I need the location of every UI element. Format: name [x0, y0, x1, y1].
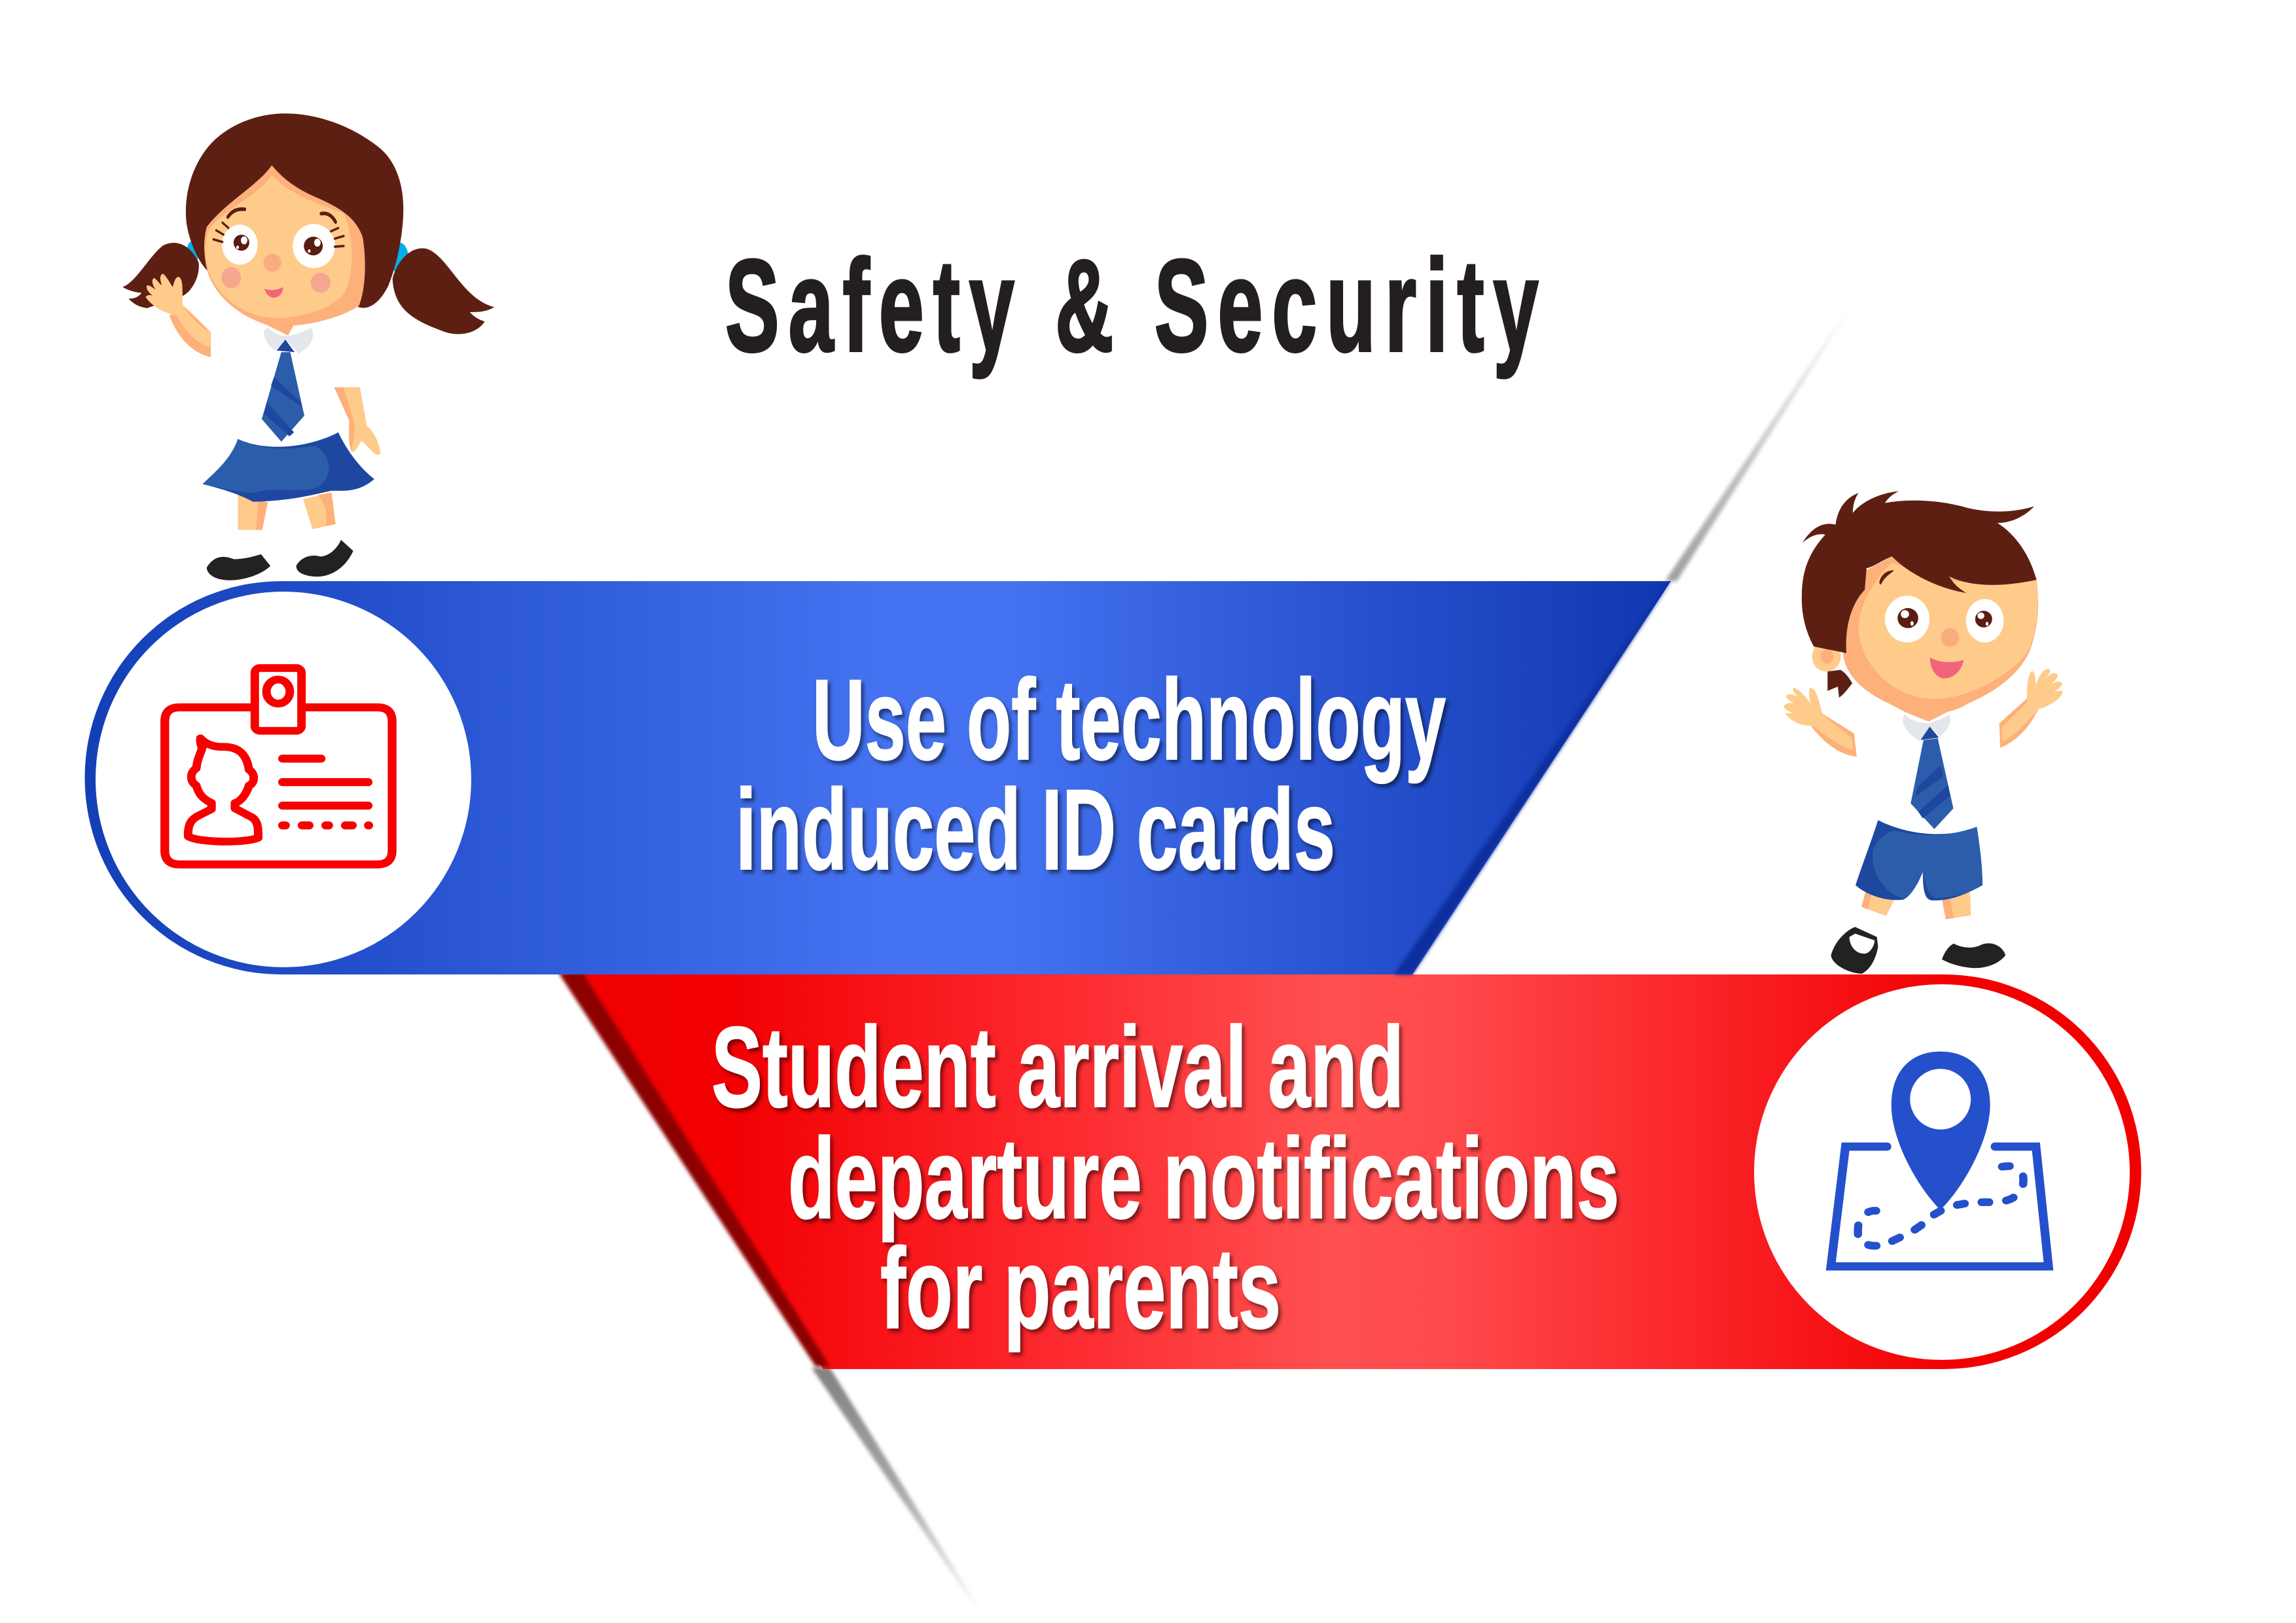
- collar: [264, 327, 313, 354]
- shadow streak: lower left: [812, 1368, 982, 1614]
- panel: blue banner: [84, 581, 1671, 974]
- lower hair: [1827, 670, 1852, 698]
- ear: [1812, 641, 1841, 671]
- hair: [1802, 491, 2036, 653]
- brows and lashes: [213, 209, 344, 247]
- eyes: [222, 224, 335, 268]
- brow: [1879, 570, 1894, 584]
- head: [186, 113, 403, 336]
- face shadow: [204, 165, 365, 336]
- shorts: [1856, 820, 1982, 901]
- pigtails: [122, 243, 494, 334]
- face light: [206, 175, 352, 318]
- collar: [1903, 714, 1950, 741]
- text: red banner: Student arrival and: [711, 1004, 1404, 1132]
- title: Safety & Security: [725, 233, 1538, 379]
- face light: [1858, 563, 2038, 699]
- text: blue banner: induced ID cards: [736, 766, 1335, 894]
- tie: [262, 340, 304, 442]
- red banner shape: [568, 974, 2142, 1369]
- text: red banner: [711, 1004, 1619, 1353]
- legs: [1861, 892, 1971, 919]
- illustration: girl: [122, 113, 494, 580]
- text: red banner: departure notifications: [788, 1115, 1619, 1243]
- text: blue banner: [736, 656, 1446, 894]
- arms: [1784, 669, 2063, 757]
- nose: [263, 254, 281, 272]
- face shadow: [1843, 556, 2038, 722]
- shoes: [1831, 927, 2005, 974]
- tie: [1910, 726, 1953, 829]
- shoes: [207, 540, 353, 580]
- blue banner dark edge: [1394, 581, 1671, 974]
- mouth: [264, 287, 283, 298]
- blue banner shape: [84, 581, 1671, 974]
- red banner dark edge: [558, 972, 830, 1366]
- illustration: boy: [1784, 491, 2063, 974]
- nose: [1941, 628, 1959, 647]
- back hair: [186, 113, 403, 308]
- shadow streak: upper right: [1665, 303, 1854, 581]
- white circle: [1754, 984, 2130, 1360]
- text: red banner: for parents: [880, 1225, 1281, 1353]
- skirt: [203, 433, 374, 502]
- white circle: [96, 592, 471, 967]
- icon: ID card: [165, 668, 392, 865]
- arms: [146, 274, 380, 455]
- eyes: [1885, 596, 2003, 643]
- cheeks: [221, 267, 331, 293]
- icon: map with location pin: [1831, 1052, 2049, 1266]
- panel: red banner: [558, 972, 2142, 1369]
- mouth: [1930, 658, 1964, 679]
- text: blue banner: Use of technology: [812, 656, 1446, 784]
- hair bands: [187, 241, 408, 275]
- legs: [238, 492, 336, 530]
